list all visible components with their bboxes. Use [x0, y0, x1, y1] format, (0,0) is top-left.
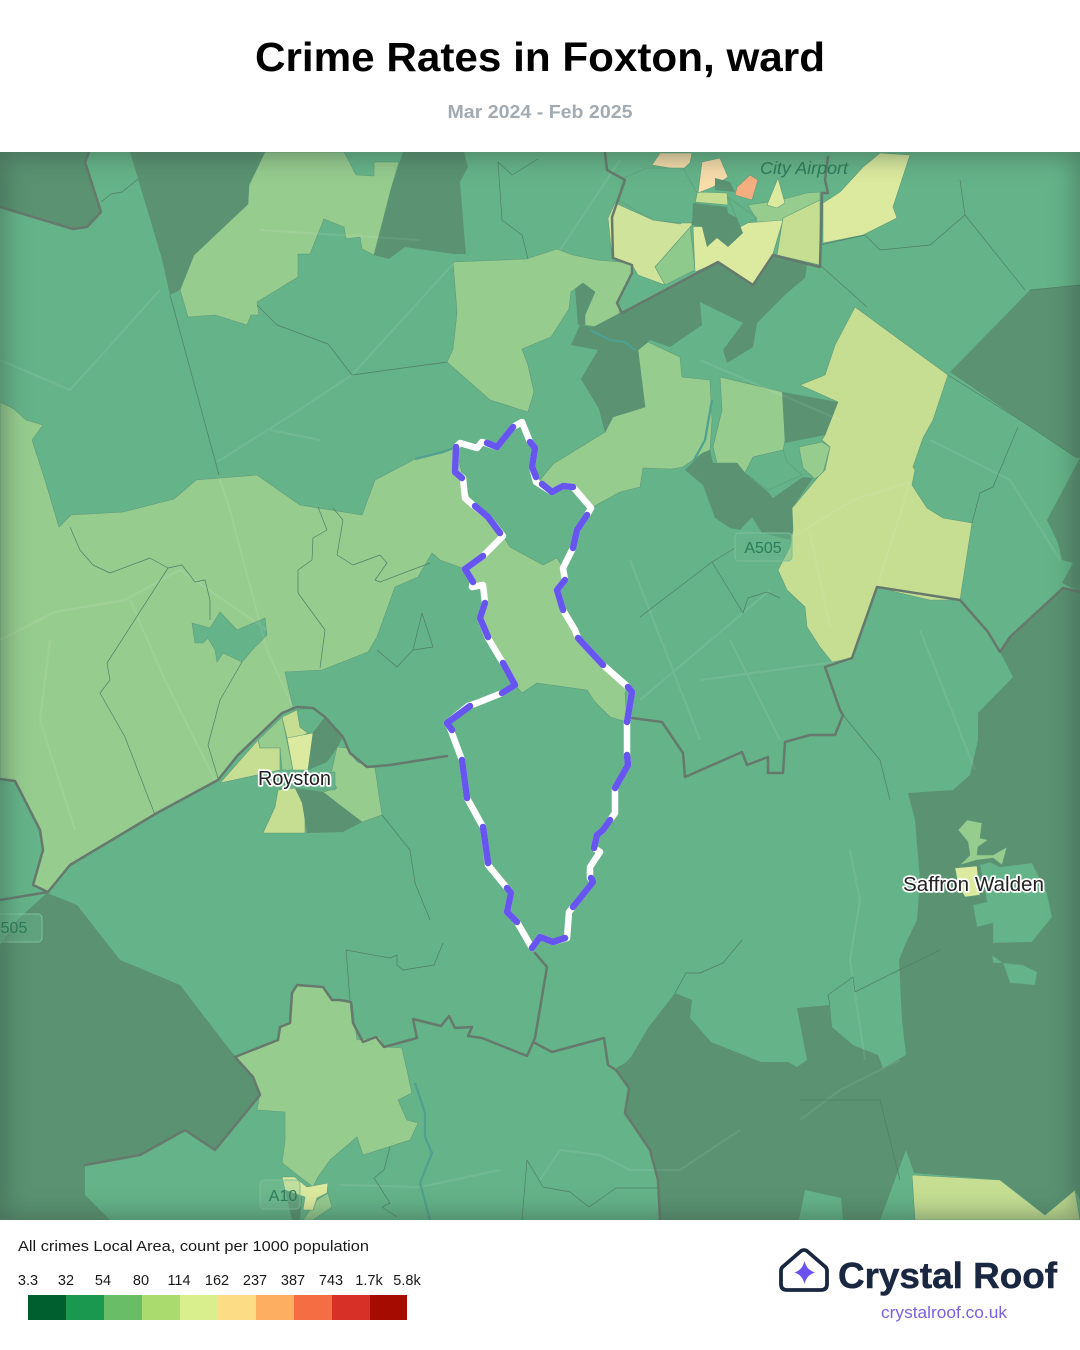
- Saffron Walden wards: [912, 820, 1080, 1220]
- legend tick labels: 237: [243, 1273, 267, 1289]
- website link: crystalroof.co.uk: [881, 1304, 1008, 1322]
- icon: house with star: [781, 1250, 827, 1290]
- legend tick labels: 54: [95, 1273, 111, 1289]
- subtitle: date range: Mar 2024 - Feb 2025: [448, 102, 632, 122]
- ward outline white: [447, 422, 632, 948]
- logo: Crystal Roof: [781, 1250, 1058, 1322]
- peach and orange high-crime areas: [652, 153, 758, 200]
- thin parcel boundaries: [70, 159, 1080, 1220]
- legend colour scale: [28, 1295, 407, 1320]
- choropleth map: [0, 152, 1080, 1220]
- legend tick labels: 387: [281, 1273, 305, 1289]
- district boundaries: [0, 152, 1080, 1220]
- road shield A10: [260, 1180, 300, 1209]
- legend tick labels: 743: [319, 1273, 343, 1289]
- road shield A505: A505: [744, 540, 782, 557]
- map edge vignette: [0, 152, 1080, 1220]
- legend tick labels: 5.8k: [393, 1273, 421, 1289]
- legend tick labels: 3.3: [18, 1273, 38, 1289]
- river: [415, 330, 712, 1220]
- yellow-green areas: [220, 192, 972, 833]
- place label: Saffron Walden: Saffron Walden: [903, 874, 1044, 896]
- legend tick labels: 162: [205, 1273, 229, 1289]
- legend tick labels: [18, 1273, 421, 1289]
- legend: [18, 1238, 421, 1320]
- road shield A10: A10: [269, 1188, 297, 1205]
- pale yellow areas: [282, 153, 910, 1210]
- roads: [0, 160, 1060, 1187]
- legend title: All crimes Local Area, count per 1000 population: [18, 1238, 369, 1255]
- logo wordmark: Crystal Roof: [838, 1255, 1058, 1296]
- ward boundary: Foxton: [447, 422, 632, 948]
- ward outline purple dashes: [447, 427, 632, 948]
- legend tick labels: 114: [167, 1273, 191, 1289]
- legend tick labels: 32: [58, 1273, 74, 1289]
- airport label: City Airport: [760, 158, 849, 178]
- dark low-crime areas: [0, 152, 1080, 1220]
- place label: Royston: Royston: [258, 768, 331, 790]
- road shield A505: [735, 533, 792, 561]
- legend tick labels: 80: [133, 1273, 149, 1289]
- legend tick labels: 1.7k: [355, 1273, 383, 1289]
- road shield A505 left edge: 505: [1, 920, 27, 937]
- light green areas: [0, 152, 830, 1220]
- title: Crime Rates in Foxton, ward: [255, 34, 825, 80]
- road shield A505 left edge: [0, 914, 42, 942]
- mid green areas near Cambridge: [655, 225, 695, 285]
- base green patches: [192, 168, 802, 790]
